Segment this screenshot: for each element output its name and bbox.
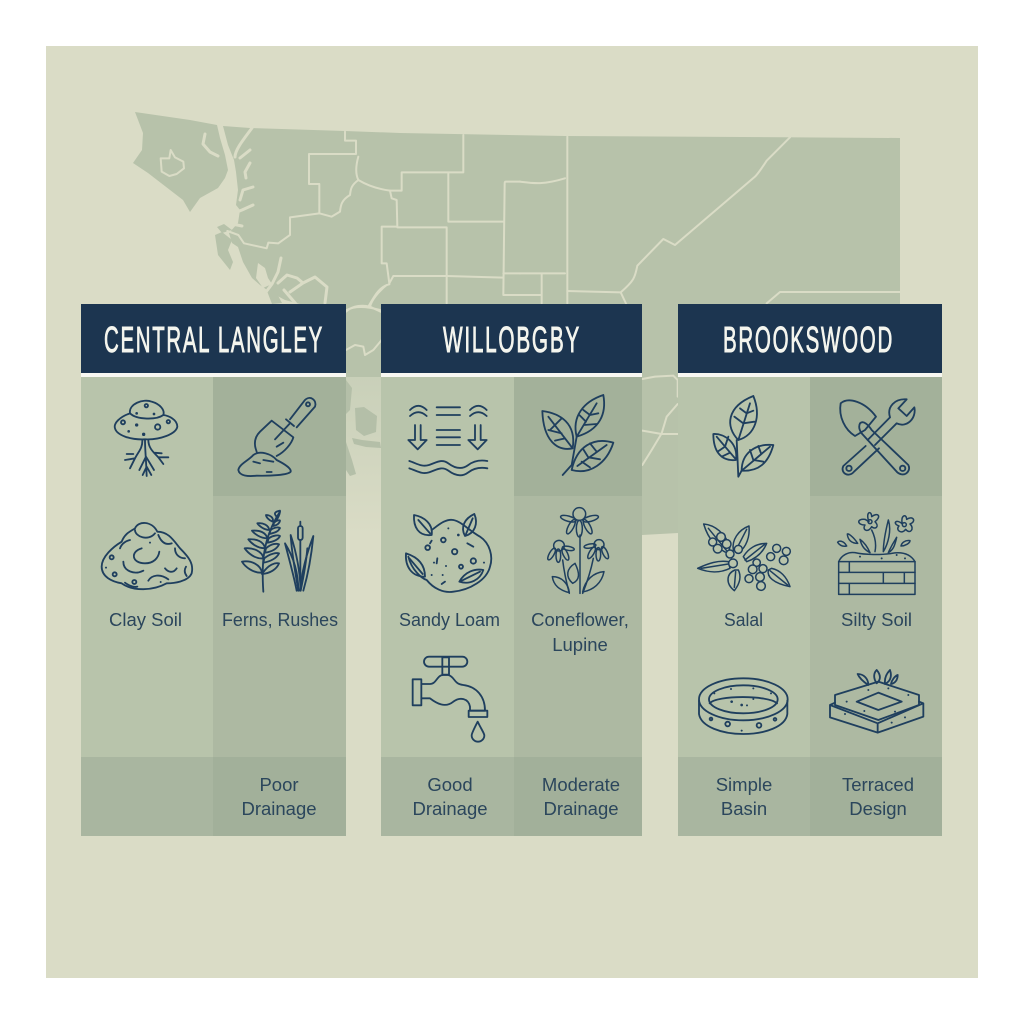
icons: Central Langley bbox=[102, 398, 315, 592]
label: Terraced Design: Design bbox=[849, 798, 907, 819]
icon: shovel and wrench bbox=[840, 399, 915, 475]
icon: water tap bbox=[413, 657, 487, 742]
heading: Central Langley: CENTRAL LANGLEY bbox=[104, 319, 324, 360]
panel: Brookswood bbox=[678, 304, 942, 836]
background map bbox=[133, 112, 900, 537]
fading land in the gap between the first two panels bbox=[346, 377, 381, 537]
label: Terraced Design: Terraced bbox=[842, 774, 914, 795]
label: Good Drainage: Good bbox=[427, 774, 473, 795]
icon: terraced bed bbox=[830, 670, 923, 733]
label: Sandy Loam: Sandy Loam bbox=[399, 609, 500, 630]
label: Simple Basin: Basin bbox=[721, 798, 767, 819]
icon: leaf sprig bbox=[713, 396, 773, 477]
label: Moderate Drainage: Drainage bbox=[543, 798, 619, 819]
label: Ferns, Rushes: Ferns, Rushes bbox=[222, 609, 338, 630]
icon: soil with roots bbox=[115, 401, 177, 476]
label: Moderate Drainage: Moderate bbox=[542, 774, 620, 795]
icon: coneflowers bbox=[546, 508, 610, 593]
heading: Willobgby bbox=[381, 304, 642, 373]
icon: clay lump bbox=[102, 523, 192, 589]
heading: Willobgby: WILLOBGBY bbox=[443, 319, 581, 360]
label: Poor Drainage: Poor bbox=[259, 774, 299, 795]
panel: Willoughby bbox=[381, 304, 642, 836]
label: Clay Soil: Clay Soil bbox=[109, 609, 182, 630]
icon: drainage arrows and water bbox=[408, 406, 487, 475]
icon: sandy loam with leaves bbox=[406, 514, 491, 592]
heading: Central Langley bbox=[81, 304, 346, 373]
label: Poor Drainage: Drainage bbox=[241, 798, 317, 819]
icon: salal bbox=[698, 524, 790, 591]
icons: Brookswood bbox=[698, 396, 923, 734]
label: Good Drainage: Drainage bbox=[412, 798, 488, 819]
icons: Willobgby bbox=[406, 395, 613, 742]
icon: fern and rushes bbox=[242, 511, 313, 592]
heading: Brookswood bbox=[678, 304, 942, 373]
label: Coneflower, Lupine: Lupine bbox=[552, 634, 608, 655]
icon: trowel in soil bbox=[238, 398, 315, 476]
heading: Brookswood: BROOKSWOOD bbox=[723, 319, 894, 360]
icon: three leaves bbox=[542, 395, 613, 475]
panel: Central Langley bbox=[81, 304, 346, 836]
label: Salal: Salal bbox=[724, 609, 763, 630]
label: Simple Basin: Simple bbox=[716, 774, 772, 795]
icon: raised bed with flowers bbox=[838, 513, 915, 594]
icon: simple basin bbox=[699, 678, 788, 734]
label: Coneflower, Lupine: Coneflower, bbox=[531, 609, 629, 630]
label: Silty Soil: Silty Soil bbox=[841, 609, 912, 630]
